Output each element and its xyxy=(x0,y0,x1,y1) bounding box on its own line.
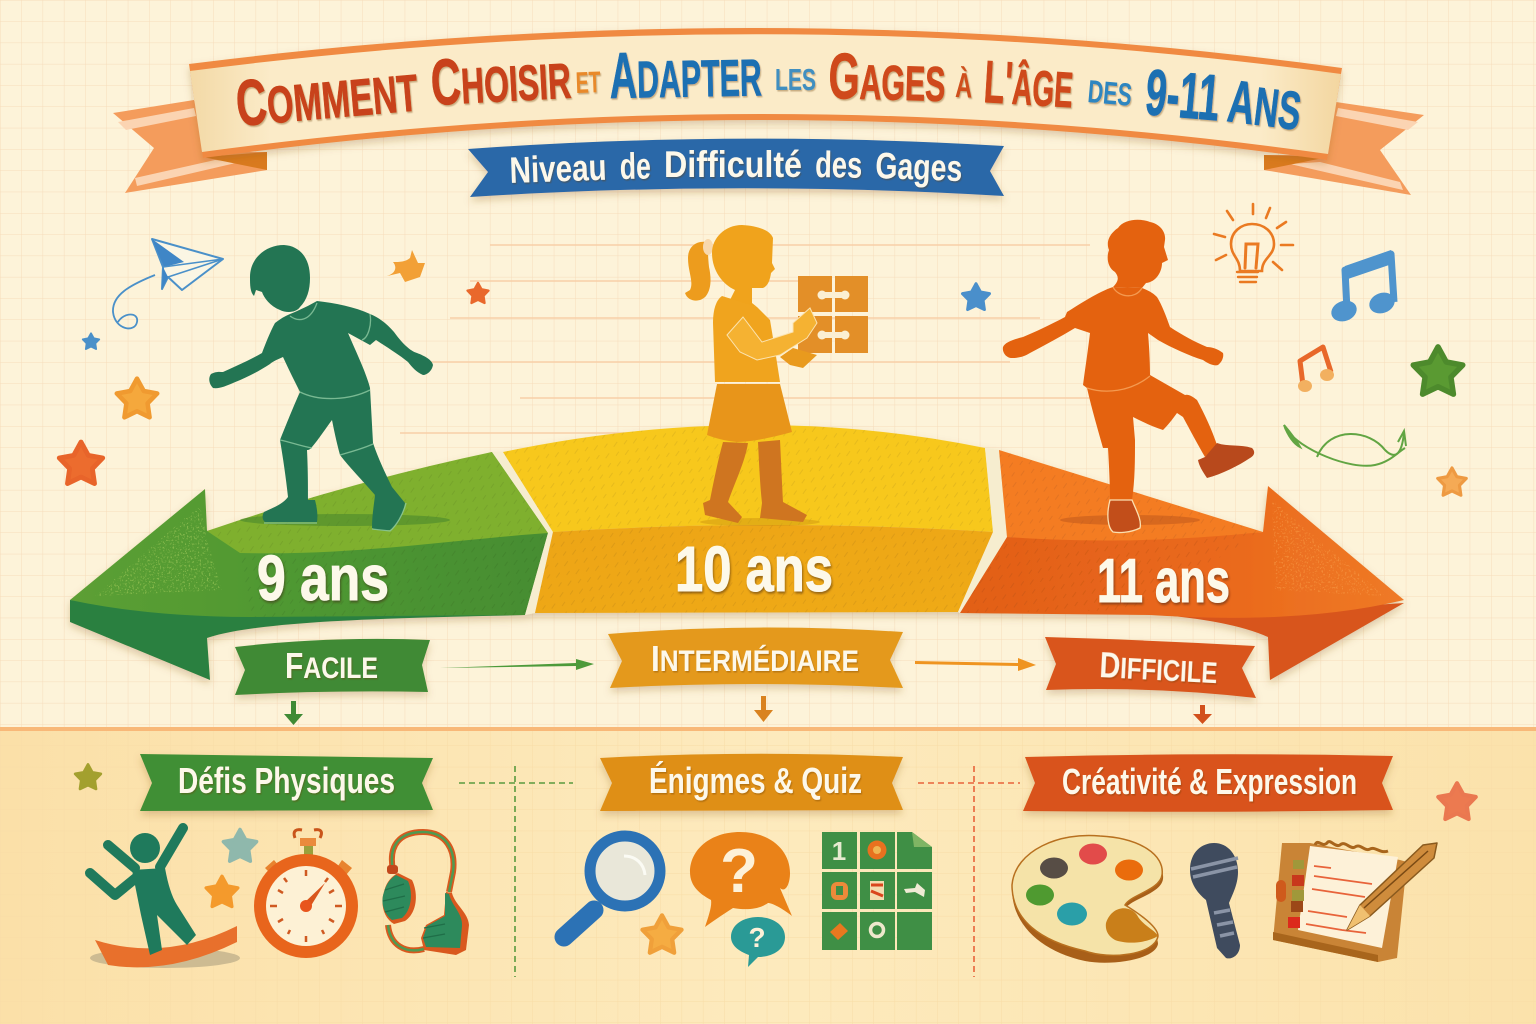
icon: orange star small xyxy=(206,876,238,906)
character: green boy, 9 ans xyxy=(209,245,450,531)
icon: orange star xyxy=(117,379,157,417)
icon: stopwatch xyxy=(254,830,358,958)
title banner xyxy=(113,28,1424,195)
title text xyxy=(233,36,1305,143)
category ribbon: Créativité & Expression: Créativité & Expression xyxy=(1062,761,1357,802)
category ribbon: Énigmes & Quiz xyxy=(600,754,903,811)
decorative star: coral xyxy=(1438,783,1476,819)
subtitle ribbon xyxy=(468,139,1004,197)
title text: ANS xyxy=(1224,67,1305,143)
legs xyxy=(703,440,807,523)
subtitle text: Gages xyxy=(875,145,963,189)
icon: small blue star xyxy=(83,333,99,349)
level ribbon: Facile xyxy=(235,639,430,695)
icon: orange question bubble xyxy=(690,832,792,927)
icon: blue star xyxy=(962,284,990,310)
arrow segment: green, 9 ans xyxy=(70,452,553,680)
icon: light bulb xyxy=(1214,204,1293,282)
head xyxy=(712,225,775,307)
subtitle text: de xyxy=(619,145,651,187)
icon: paint palette xyxy=(1012,835,1163,963)
front arm and hands xyxy=(780,348,817,368)
banner body xyxy=(189,28,1342,160)
arrow: down red xyxy=(1193,705,1212,724)
ponytail xyxy=(685,242,711,301)
arrow: facile to intermédiaire xyxy=(440,659,594,670)
title text: 9-11 xyxy=(1143,55,1223,134)
body xyxy=(713,296,780,382)
subtitle text xyxy=(509,144,963,191)
decorative doodles: right xyxy=(962,204,1466,495)
title text: CHOISIR xyxy=(429,39,573,119)
title text: À xyxy=(955,65,973,106)
icon: teal star xyxy=(224,830,256,861)
icon: small red star xyxy=(468,283,488,303)
category ribbon: Défis Physiques: Défis Physiques xyxy=(178,760,395,801)
title text: DES xyxy=(1086,73,1133,113)
icon: puzzle grid: 1 xyxy=(832,836,846,866)
panel: défis physiques xyxy=(90,754,469,968)
icon: child balancing xyxy=(90,828,240,968)
icon: microphone xyxy=(1190,843,1240,958)
icon: resistance band with hands xyxy=(382,832,469,955)
icon: blue music note xyxy=(1328,250,1398,325)
right ribbon tail xyxy=(1264,102,1424,195)
level ribbon: Intermédiaire xyxy=(608,627,903,688)
icon: green star xyxy=(1413,347,1463,394)
arrow segment: orange, 11 ans xyxy=(960,450,1404,680)
category ribbon: Créativité & Expression xyxy=(1023,754,1393,812)
difficulty arrow xyxy=(70,425,1404,680)
icon: notebook and pencil xyxy=(1273,842,1437,962)
level ribbon: Facile: FACILE xyxy=(285,645,378,686)
decorative star: olive xyxy=(75,765,101,789)
subtitle text: des xyxy=(815,144,863,186)
label: 10 ans: 10 ans xyxy=(675,533,833,605)
puzzle xyxy=(798,276,868,353)
title text: GAGES xyxy=(828,39,947,115)
arrow: intermédiaire to difficile xyxy=(915,658,1036,671)
title text: ET xyxy=(575,66,601,100)
title text: L'ÂGE xyxy=(982,48,1075,120)
icon: puzzle grid xyxy=(822,832,932,950)
title text: LES xyxy=(775,62,816,97)
category ribbon: Défis Physiques xyxy=(140,754,433,811)
icon: small orange music note xyxy=(1298,347,1334,392)
icon: small orange star xyxy=(1438,468,1466,495)
icon: orange question bubble: ? xyxy=(720,837,758,906)
panel: énigmes et quiz xyxy=(564,754,932,967)
subtitle text: Niveau xyxy=(509,147,607,191)
character: yellow girl, 10 ans xyxy=(685,225,868,526)
decorative doodles: left xyxy=(59,239,488,484)
dashed dividers xyxy=(459,766,1020,977)
icon: red orange star xyxy=(59,442,103,484)
level ribbon: Intermédiaire: INTERMÉDIAIRE xyxy=(651,638,859,679)
icon: vine arrow xyxy=(1284,425,1406,466)
icon: teal question bubble xyxy=(731,917,785,967)
icon: teal question bubble: ? xyxy=(748,922,766,953)
icon: orange leaf xyxy=(383,250,425,282)
category ribbon: Énigmes & Quiz: Énigmes & Quiz xyxy=(649,760,862,801)
title text: COMMENT xyxy=(233,51,421,140)
skirt xyxy=(707,384,792,442)
arrow segment: yellow, 10 ans xyxy=(503,425,1007,613)
icon: paper plane xyxy=(113,239,223,328)
level ribbon: Difficile xyxy=(1045,637,1256,698)
level ribbon: Difficile: DIFFICILE xyxy=(1099,644,1219,691)
label: 9 ans: 9 ans xyxy=(257,542,389,614)
left ribbon tail xyxy=(113,100,267,193)
arrow: down orange xyxy=(754,696,773,722)
arrow: down green xyxy=(284,701,303,725)
character: orange boy, 11 ans xyxy=(1003,220,1254,533)
panel: créativité et expression xyxy=(1012,754,1437,963)
title text: ADAPTER xyxy=(609,36,762,112)
subtitle text: Difficulté xyxy=(664,144,802,185)
label: 11 ans: 11 ans xyxy=(1097,547,1230,616)
icon: orange star xyxy=(642,915,682,953)
icon: magnifying glass xyxy=(564,836,660,937)
